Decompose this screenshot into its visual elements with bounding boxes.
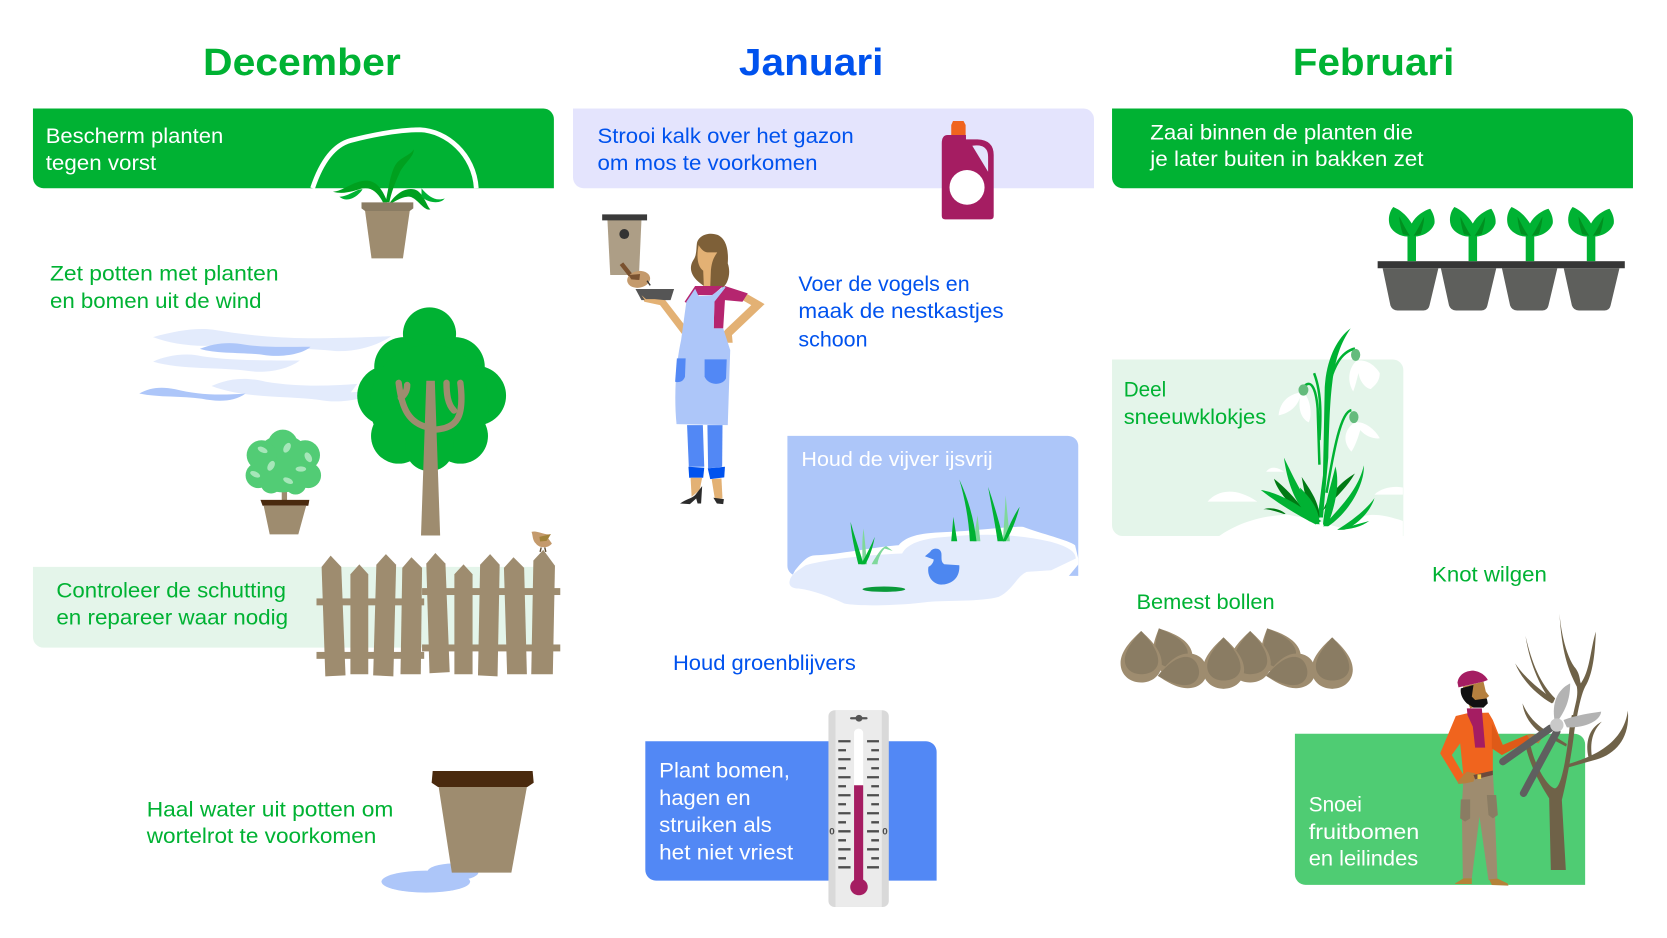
panel: bescherm planten tegen vorst: Bescherm planten	[46, 124, 223, 148]
text: houd groenblijvers: Houd groenblijvers	[673, 651, 856, 675]
panel: plant bomen: struiken als	[659, 813, 772, 837]
text: haal water uit potten: Haal water uit potten om	[147, 797, 393, 821]
snow around pond	[792, 527, 1078, 580]
text: haal water uit potten: wortelrot te voorkomen	[146, 824, 376, 848]
panel: controleer de schutting	[33, 567, 544, 648]
panel: snoei fruitbomen	[1295, 734, 1585, 885]
panel: plant bomen: het niet vriest	[659, 840, 793, 864]
icon: seedling tray	[1378, 207, 1625, 310]
text: zet potten uit de wind: en bomen uit de wind	[50, 289, 262, 313]
title: Februari: Februari	[1293, 41, 1454, 84]
icon: small bird on fence	[532, 532, 552, 552]
frozen pond	[789, 535, 1076, 605]
panel: strooi kalk: om mos te voorkomen	[597, 151, 818, 175]
panel: strooi kalk: Strooi kalk over het gazon	[597, 124, 854, 148]
panel: deel sneeuwklokjes: sneeuwklokjes	[1124, 405, 1266, 429]
illustration: woman feeding birds	[620, 234, 765, 504]
title: Januari: Januari	[739, 41, 883, 84]
panel: houd de vijver ijsvrij: Houd de vijver ijsvrij	[801, 449, 993, 471]
text: zet potten uit de wind: Zet potten met planten	[50, 261, 279, 285]
icon: pot with puddle	[381, 771, 534, 893]
icon: wooden fence	[316, 550, 560, 676]
lily pad	[862, 587, 905, 592]
panel: houd de vijver ijsvrij	[787, 436, 1078, 605]
icon: bird house	[602, 214, 647, 275]
text: voer de vogels: schoon	[798, 327, 868, 351]
icon: thermometer: 0	[829, 827, 835, 838]
panel: bescherm planten tegen vorst	[33, 108, 554, 188]
panel: snoei fruitbomen: Snoei	[1309, 792, 1362, 816]
text: voer de vogels: Voer de vogels en	[798, 272, 970, 296]
duck	[925, 549, 959, 585]
text: bemest bollen: Bemest bollen	[1136, 590, 1275, 614]
icon: large tree	[357, 307, 506, 535]
panel: deel sneeuwklokjes: Deel	[1124, 377, 1166, 401]
reeds right	[951, 480, 1020, 541]
panel: controleer de schutting: en repareer waar nodig	[56, 605, 288, 629]
panel: zaai binnen: Zaai binnen de planten die	[1150, 120, 1413, 144]
panel: zaai binnen	[1112, 108, 1633, 188]
panel: bescherm planten tegen vorst: tegen vorst	[46, 151, 156, 175]
panel: snoei fruitbomen: fruitbomen	[1309, 820, 1419, 844]
panel: snoei fruitbomen: en leilindes	[1309, 847, 1418, 871]
panel: plant bomen: Plant bomen,	[659, 758, 790, 782]
icon: potted plant under fleece	[333, 149, 445, 258]
panel: deel sneeuwklokjes	[1112, 359, 1403, 536]
text: knot wilgen: Knot wilgen	[1432, 562, 1547, 586]
panel: strooi kalk	[573, 108, 1094, 188]
icon: small potted shrub	[246, 430, 321, 534]
icon: thermometer	[828, 710, 889, 907]
text: haal water uit potten	[146, 797, 393, 848]
panel: controleer de schutting: Controleer de schutting	[56, 578, 286, 602]
panel: plant bomen	[645, 741, 937, 881]
icon: wind streaks	[139, 329, 391, 401]
reeds left	[851, 522, 893, 564]
text: voer de vogels: maak de nestkastjes	[798, 299, 1004, 323]
text: zet potten uit de wind	[50, 261, 279, 313]
illustration: snowdrops in snow	[1208, 328, 1403, 539]
illustration: gardener with pruning shears	[1440, 671, 1601, 886]
illustration: bare tree	[1515, 614, 1628, 870]
panel: plant bomen: hagen en	[659, 786, 751, 810]
text: voer de vogels	[798, 272, 1004, 351]
icon: thermometer: 0	[882, 827, 888, 838]
icon: lime bottle	[942, 121, 994, 219]
panel: zaai binnen: je later buiten in bakken zet	[1149, 147, 1424, 171]
icon: flower bulbs	[1121, 621, 1353, 693]
title: December: December	[203, 41, 401, 84]
